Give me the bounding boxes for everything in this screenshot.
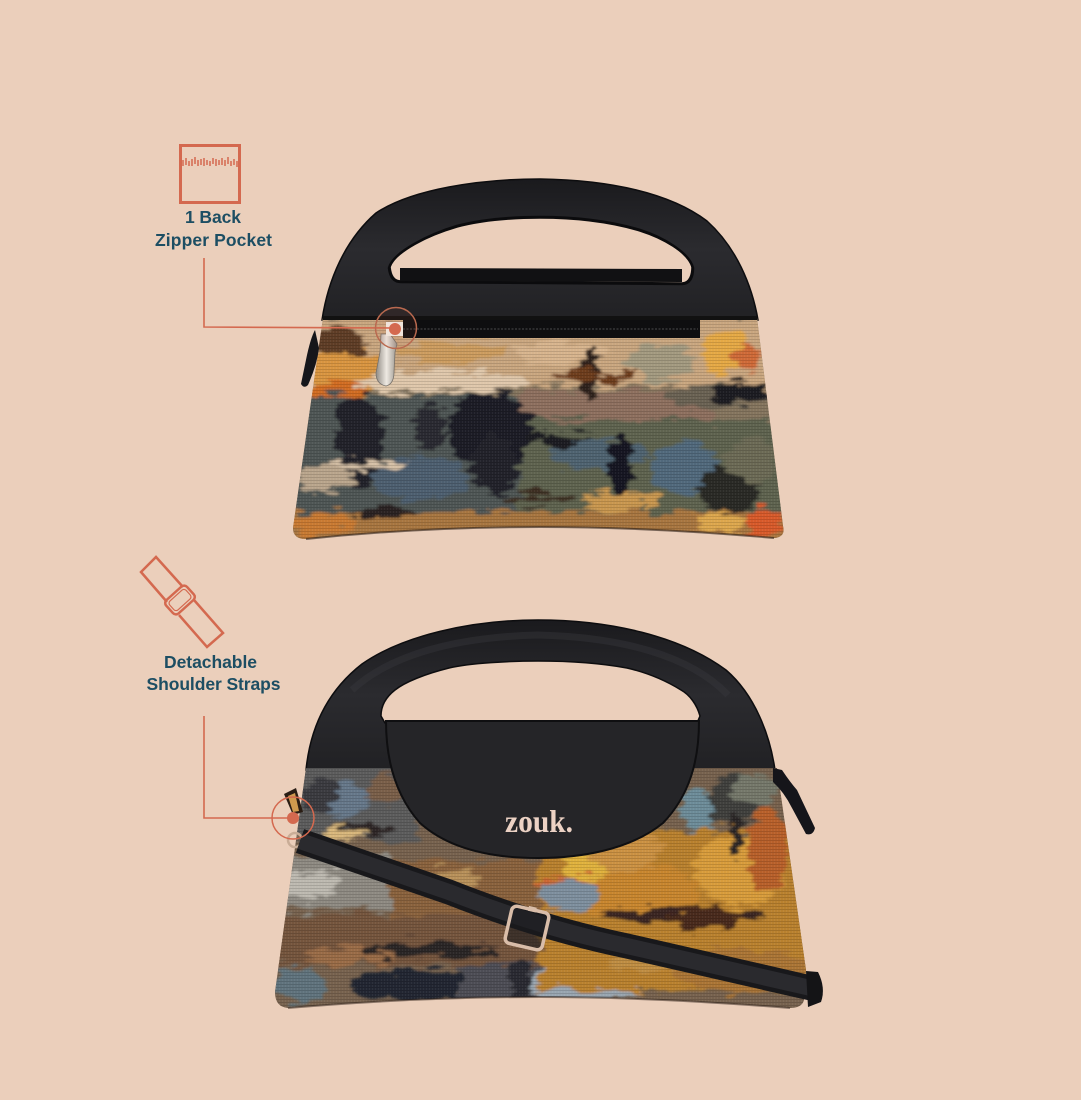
bag 2 fabric <box>265 760 815 1015</box>
marker: strap ring and dot <box>272 797 314 839</box>
bag 2 strap buckle <box>504 902 550 951</box>
icon: strap with buckle <box>141 557 223 647</box>
icon: zipper pocket <box>180 146 240 202</box>
bag 2 logo: zouk: zouk. <box>505 803 573 839</box>
label: Detachable Shoulder Straps: Shoulder Straps <box>146 674 281 694</box>
bag 1 inner strip <box>400 268 682 282</box>
bag 2 handle highlight <box>352 635 728 695</box>
bag 1 leather band seam <box>323 316 757 320</box>
bag 1 zip end tab <box>301 330 319 387</box>
bag 2 flap <box>386 721 699 858</box>
bag 2: front view with flap and strap <box>265 620 823 1015</box>
callout: back zipper pocket <box>155 146 272 250</box>
callout: detachable shoulder straps <box>141 557 281 694</box>
bag 1 fabric <box>285 310 795 545</box>
bag 1 zipper pull <box>376 334 397 386</box>
bag 1 zipper teeth <box>403 328 698 330</box>
bag 1 zipper slider <box>386 322 403 336</box>
bag 2 handle <box>306 620 775 770</box>
bag 2 zip end tab <box>773 768 815 834</box>
label: 1 Back Zipper Pocket: Zipper Pocket <box>155 230 272 250</box>
leader line: shoulder strap <box>204 716 314 839</box>
bag 1 handle opening rim <box>389 217 693 284</box>
bag 2 hardware clip <box>284 788 303 847</box>
bag 2 lower edge shadow <box>288 997 790 1008</box>
leader line: zipper pocket <box>204 258 416 348</box>
bag 1 handle <box>322 179 758 320</box>
bag 1: back view with zipper pocket <box>285 179 795 545</box>
label: 1 Back Zipper Pocket: 1 Back <box>185 207 241 227</box>
bag 2 shoulder strap <box>300 841 823 1007</box>
marker: zipper ring and dot <box>376 308 416 348</box>
bag 1 zipper tape <box>403 320 700 338</box>
label: Detachable Shoulder Straps: Detachable <box>164 652 257 672</box>
bag 1 lower edge shadow <box>306 527 774 539</box>
